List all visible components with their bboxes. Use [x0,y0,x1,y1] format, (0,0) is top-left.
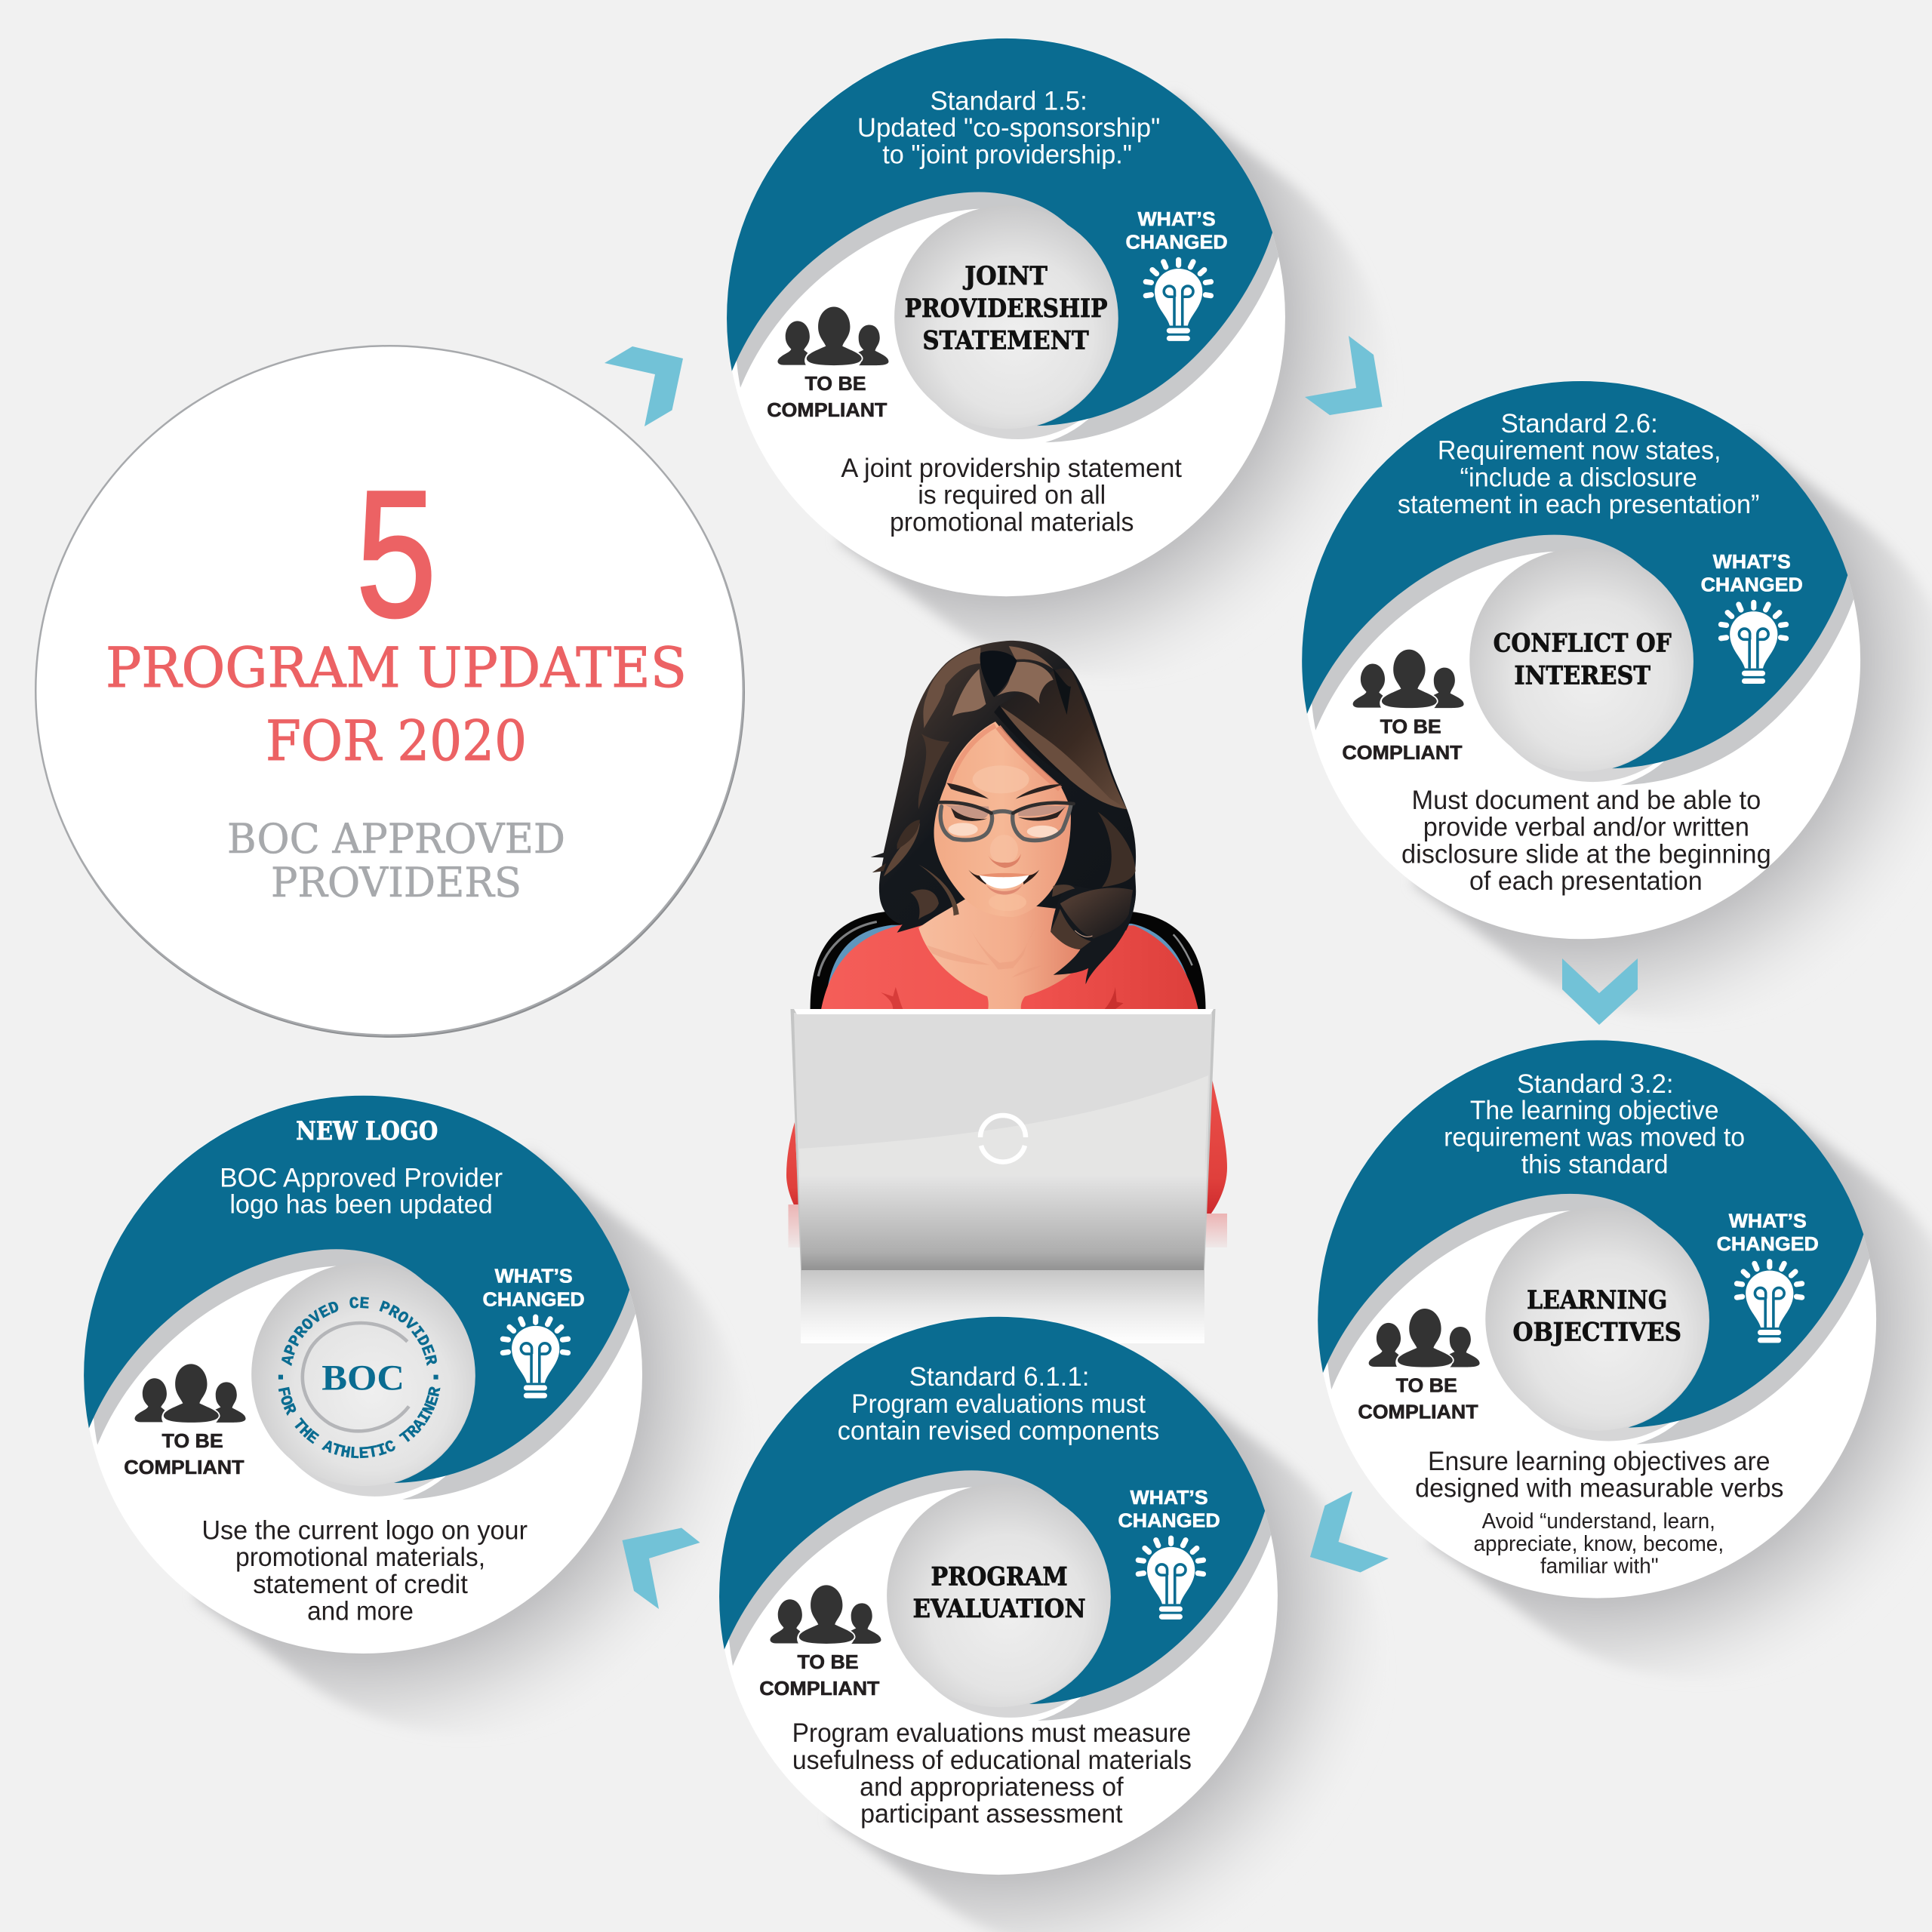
text: what's changed 2: statement in each presentation” [1398,490,1759,519]
text: verbs to avoid: Avoid “understand, learn, [1482,1509,1715,1534]
heading: joint providership statement: STATEMENT [922,325,1089,355]
laptop sleeves [786,1079,1227,1247]
woman figure [811,641,1205,1010]
heading: conflict of interest: CONFLICT OF [1494,628,1672,658]
title: for 2020: FOR 2020 [266,709,527,774]
heading: program evaluation: EVALUATION [913,1593,1086,1623]
heading: learning objectives: OBJECTIVES [1512,1316,1681,1346]
text: what's changed 5: logo has been updated [229,1189,493,1219]
panel: main title circle [35,345,745,1038]
arrow: joint providership to conflict of interest [1305,336,1383,415]
text: what's changed 1: to "joint providership." [882,140,1132,170]
arrow: program evaluation to new logo [622,1527,700,1609]
text: what's changed 3: The learning objective [1470,1096,1718,1125]
text: verbs to avoid: familiar with" [1540,1554,1659,1578]
title: program updates: PROGRAM UPDATES [106,636,687,700]
label: to be compliant: TO BE [1380,716,1441,737]
text: compliance 4: Program evaluations must measure [792,1718,1191,1748]
logo: BOC approved CE provider seal: APPROVED CE PROVIDER [281,1297,437,1366]
text: what's changed 4: Program evaluations must [851,1389,1146,1419]
panel: learning objectives [1318,1040,1932,1679]
label: to be compliant: COMPLIANT [1358,1401,1478,1423]
label: to be compliant: TO BE [797,1652,859,1673]
text: what's changed 2: “include a disclosure [1460,463,1697,492]
text: compliance 1: is required on all [918,481,1106,510]
text: compliance 2: Must document and be able to [1411,786,1761,815]
text: what's changed 1: Updated "co-sponsorship" [857,113,1160,143]
text: what's changed 4: Standard 6.1.1: [909,1362,1089,1392]
panel: joint providership statement [727,38,1392,677]
laptop logo [980,1115,1026,1162]
text: compliance 5: and more [307,1597,414,1626]
heading: new logo: NEW LOGO [296,1115,438,1146]
text: compliance 2: disclosure slide at the beginning [1401,839,1771,869]
text: what's changed 4: contain revised components [838,1417,1159,1446]
text: compliance 5: promotional materials, [235,1543,485,1572]
label: what's changed: WHAT’S [1138,209,1216,230]
label: to be compliant: TO BE [1396,1376,1457,1397]
heading: joint providership statement: PROVIDERSHIP [905,293,1107,323]
label: what's changed: CHANGED [1118,1510,1220,1531]
label: to be compliant: COMPLIANT [759,1678,880,1700]
label: what's changed: CHANGED [1125,232,1228,253]
subtitle: providers: PROVIDERS [271,859,521,906]
text: compliance 2: provide verbal and/or written [1423,813,1749,842]
text: what's changed 5: BOC Approved Provider [220,1164,503,1193]
label: what's changed: WHAT’S [1729,1211,1807,1232]
logo: BOC approved CE provider seal: BOC [321,1358,405,1398]
text: what's changed 3: requirement was moved to [1444,1123,1745,1152]
text: verbs to avoid: appreciate, know, become, [1473,1532,1724,1556]
label: to be compliant: TO BE [804,374,866,395]
heading: program evaluation: PROGRAM [931,1561,1068,1591]
heading: learning objectives: LEARNING [1527,1284,1667,1315]
label: what's changed: WHAT’S [1713,552,1791,573]
text: what's changed 3: this standard [1521,1149,1669,1179]
text: compliance 5: statement of credit [253,1570,468,1599]
heading: joint providership statement: JOINT [962,260,1048,291]
label: what's changed: CHANGED [1717,1234,1819,1255]
laptop lid [791,1009,1215,1270]
panel: conflict of interest [1302,380,1932,1020]
label: to be compliant: COMPLIANT [767,400,888,421]
subtitle: BOC approved: BOC APPROVED [227,815,565,863]
panel: program evaluation [719,1316,1384,1932]
text: what's changed 2: Standard 2.6: [1501,409,1658,438]
text: compliance 4: participant assessment [860,1799,1123,1829]
panel: new logo [84,1096,721,1725]
label: what's changed: CHANGED [1701,575,1803,596]
text: compliance 5: Use the current logo on your [202,1515,528,1545]
text: what's changed 2: Requirement now states, [1438,436,1721,466]
arrow: learning objectives to program evaluation [1310,1491,1389,1573]
text: compliance 1: A joint providership statement [841,454,1182,483]
text: what's changed 3: Standard 3.2: [1517,1069,1673,1099]
big number 5: 5 [356,454,436,654]
label: what's changed: WHAT’S [1131,1487,1208,1509]
logo: BOC approved CE provider seal [278,1297,441,1458]
text: compliance 4: and appropriateness of [860,1772,1124,1801]
label: what's changed: WHAT’S [495,1266,573,1287]
text: compliance 4: usefulness of educational materials [792,1746,1192,1775]
label: to be compliant: COMPLIANT [124,1457,245,1478]
illustration: woman at laptop [786,641,1227,1343]
text: compliance 3: Ensure learning objectives are [1428,1447,1770,1476]
text: compliance 2: of each presentation [1469,866,1703,896]
arrow: conflict of interest to learning objectives [1562,958,1638,1025]
label: to be compliant: COMPLIANT [1342,743,1463,764]
arrow: title to joint providership [605,346,683,426]
laptop reflection [801,1270,1204,1343]
label: what's changed: CHANGED [483,1289,585,1310]
text: compliance 1: promotional materials [890,507,1134,537]
label: to be compliant: TO BE [162,1431,223,1452]
text: what's changed 1: Standard 1.5: [931,86,1088,115]
heading: conflict of interest: INTEREST [1514,660,1651,691]
text: compliance 3: designed with measurable verbs [1415,1473,1783,1503]
logo: BOC approved CE provider seal: FOR THE ATHLETIC TRAINER [278,1387,441,1458]
